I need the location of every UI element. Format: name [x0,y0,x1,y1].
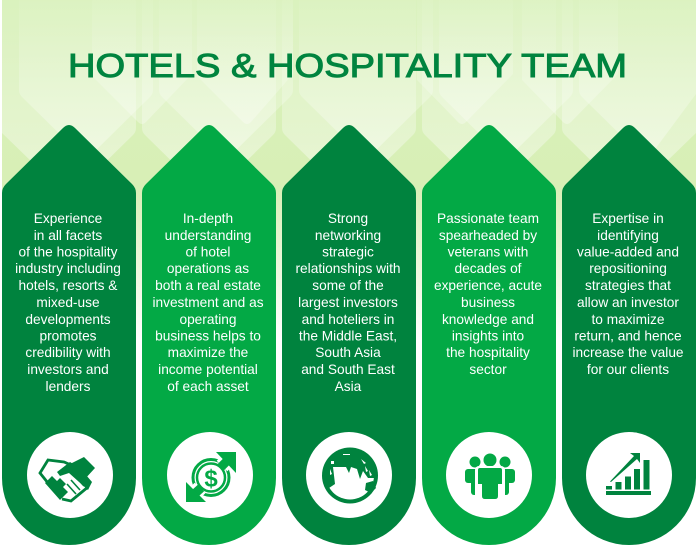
text: experience: developments [25,312,111,327]
icon: dollar with arrows: $ [204,466,218,492]
title: HOTELS & HOSPITALITY TEAM [68,48,627,85]
text: expertise: increase the value [572,345,684,360]
text: strong networking: largest investors [298,295,398,310]
text: expertise: identifying [597,228,659,243]
text: strong networking: strategic [322,244,374,260]
text: strong networking: and South East [301,362,395,377]
icon: dollar with arrows [167,432,253,518]
text: in-depth understanding: income potential [158,362,258,377]
background with ghost arrows [2,0,696,340]
text: in-depth understanding: operating [179,312,237,327]
icon: team [446,432,532,518]
text: strong networking: networking [315,228,381,243]
text: in-depth understanding: both a real estate [155,278,261,293]
text: strong networking: Asia [335,379,362,394]
text: experience: hotels, resorts & [19,278,117,293]
text: in-depth understanding: investment and as [152,295,264,310]
text: experience: lenders [46,379,91,394]
text: experience: credibility with [25,345,111,360]
text: strong networking [296,211,400,394]
text: expertise: to maximize [591,312,665,327]
text: passionate team: decades of [455,261,522,276]
icon: handshake [27,432,113,518]
text: in-depth understanding: business helps to [155,328,261,344]
text: experience: in all facets [34,228,102,243]
text: strong networking: South Asia [315,345,381,360]
text: experience: of the hospitality [19,244,118,260]
text: passionate team: experience, acute [434,278,542,293]
text: strong networking: relationships with [296,261,400,276]
text: experience: mixed-use [36,295,100,310]
text: strong networking: some of the [312,278,384,293]
text: expertise: return, and hence [574,328,682,344]
text: passionate team: Passionate team [437,211,539,226]
text: passionate team: the hospitality [446,345,530,360]
text: experience: industry including [15,261,121,276]
text: passionate team: veterans with [448,244,528,260]
text: in-depth understanding: understanding [165,228,251,243]
text: strong networking: Strong [328,211,368,226]
text: in-depth understanding: of hotel [186,244,230,260]
text: expertise: repositioning [589,261,667,276]
text: expertise: allow an investor [577,295,679,310]
text: in-depth understanding [152,211,264,394]
panel: expertise [562,125,696,545]
text: expertise: strategies that [585,278,671,293]
text: strong networking: and hoteliers in [302,312,394,327]
text: expertise [572,211,684,377]
panel: strong networking [282,125,416,545]
panel: passionate team [422,125,556,545]
text: experience [15,211,121,394]
icon: growth chart [586,432,672,518]
text: passionate team: business [461,295,515,310]
panel: experience [2,125,136,545]
text: expertise: for our clients [587,362,669,377]
text: passionate team: insights into [452,328,525,344]
text: in-depth understanding: of each asset [167,379,249,394]
text: passionate team: spearheaded by [439,228,537,243]
text: passionate team: sector [469,362,507,377]
text: experience: Experience [34,211,102,226]
panel: in-depth understanding [142,125,276,545]
text: experience: promotes [39,328,97,344]
icon: globe [306,432,392,518]
text: experience: investors and [27,362,109,377]
text: passionate team: knowledge and [442,312,534,327]
text: expertise: value-added and [577,244,679,260]
text: in-depth understanding: In-depth [183,211,233,226]
text: in-depth understanding: operations as [167,261,249,276]
text: strong networking: the Middle East, [299,328,397,344]
text: expertise: Expertise in [592,211,664,226]
text: in-depth understanding: maximize the [168,345,248,360]
text: passionate team [434,211,542,377]
